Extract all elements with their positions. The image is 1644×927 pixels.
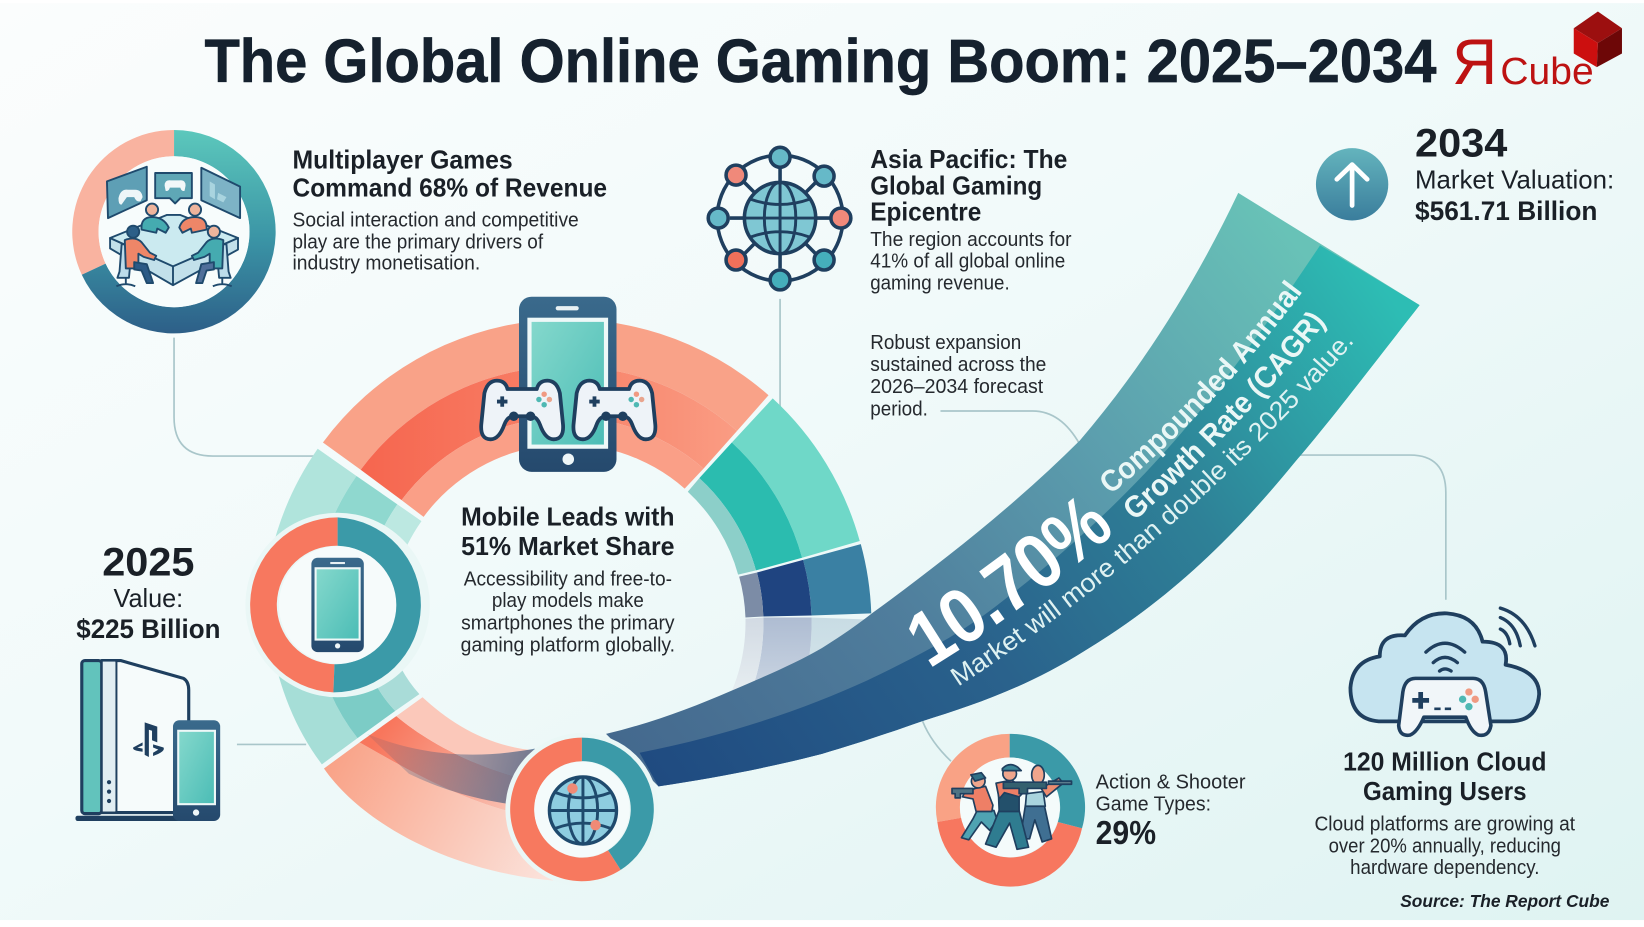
panel: asia pacific: [708, 144, 1072, 294]
text block: forecast period: [870, 331, 1046, 421]
source note: Source: The Report Cube: [1400, 891, 1609, 911]
icon: globe network: [708, 147, 851, 290]
logo: Я: [1452, 25, 1497, 98]
icon: phone with two controllers: [481, 297, 655, 472]
CAGR label line 2: Growth Rate (CAGR): [1125, 312, 1328, 517]
main ring chart: [263, 319, 871, 881]
text block: forecast period: Robust expansion: [870, 331, 1021, 354]
ring segment: coral mobile: [323, 319, 769, 517]
heading: Epicentre: [870, 197, 981, 227]
icon: console and phone: [75, 661, 220, 821]
donut: action: [936, 734, 1085, 887]
icon: players at table: [107, 167, 240, 286]
label: Action & Shooter: [1096, 770, 1246, 793]
ring segment: faded blue: [732, 618, 871, 740]
ring segment: teal: [688, 398, 860, 575]
body text: [1314, 813, 1575, 879]
heading: [870, 144, 1067, 227]
body text: play are the primary drivers of: [293, 230, 543, 253]
panel: mobile leads: [461, 502, 675, 657]
panel: 2025 value: [75, 541, 220, 821]
label: [1096, 770, 1246, 852]
panel: 2034 valuation: $561.71 Billion: [1415, 195, 1597, 226]
growth band: [606, 192, 1420, 786]
heading: [1343, 747, 1546, 806]
band tail shadow: [367, 734, 545, 807]
body text: Social interaction and competitive: [293, 208, 579, 231]
panel: mobile leads: smartphones the primary: [461, 612, 675, 635]
icon: left controller: [481, 381, 563, 439]
icon: right controller: [573, 381, 655, 439]
ring segment: navy: [739, 544, 871, 618]
label: Game Types:: [1096, 792, 1211, 815]
text block: forecast period: period.: [870, 398, 928, 421]
icon: up arrow: [1316, 148, 1388, 220]
label: 29%: [1096, 815, 1156, 852]
heading: [293, 144, 607, 203]
body text: hardware dependency.: [1350, 856, 1539, 879]
panel: mobile leads: gaming platform globally.: [461, 634, 675, 657]
panel: 2025 value: 2025: [102, 541, 194, 585]
band caption: Market will more than double its 2025 value.: [950, 341, 1353, 686]
heading: Asia Pacific: The: [870, 144, 1067, 174]
body text: The region accounts for: [870, 228, 1072, 251]
panel: mobile leads: play models make: [492, 589, 644, 612]
body text: Cloud platforms are growing at: [1314, 813, 1575, 836]
logo: Cube: [1500, 50, 1594, 92]
heading: Command 68% of Revenue: [293, 173, 607, 203]
text block: forecast period: sustained across the: [870, 353, 1046, 376]
ring segment: fading coral lower: [324, 697, 556, 881]
panel: cloud gaming: [1314, 608, 1575, 879]
donut: multiplayer: [72, 130, 276, 333]
body text: over 20% annually, reducing: [1329, 834, 1561, 857]
ring segment: light teal upper: [263, 449, 421, 623]
panel: 2034 valuation: Market Valuation:: [1415, 164, 1614, 194]
connector lines: [174, 299, 1446, 761]
body text: industry monetisation.: [293, 251, 480, 274]
panel: mobile leads: Accessibility and free-to-: [464, 568, 672, 591]
body text: 41% of all global online: [870, 249, 1065, 272]
panel: action and shooter: [936, 734, 1246, 887]
icon: cloud controller: [1350, 608, 1539, 735]
panel: mobile leads: 51% Market Share: [461, 531, 675, 561]
body text: [293, 208, 579, 274]
heading: Multiplayer Games: [293, 144, 513, 174]
CAGR figure: 10.70%: [909, 498, 1110, 667]
heading: 120 Million Cloud: [1343, 747, 1546, 777]
ring segment: light teal lower: [271, 640, 419, 764]
panel: 2025 value: Value:: [113, 583, 183, 613]
panel: 2034 valuation: [1316, 122, 1614, 226]
text block: forecast period: 2026–2034 forecast: [870, 375, 1044, 398]
body text: gaming revenue.: [870, 271, 1010, 294]
heading: Global Gaming: [870, 170, 1042, 200]
panel: 2025 value: $225 Billion: [76, 613, 220, 644]
heading: Gaming Users: [1363, 776, 1527, 806]
CAGR label line 1: Compounded Annual: [1101, 280, 1302, 491]
body text: [870, 228, 1072, 294]
panel: 2034 valuation: 2034: [1415, 122, 1507, 166]
donut: globe: [505, 733, 658, 886]
icon: globe: [549, 777, 616, 844]
donut: mobile phone: [245, 513, 430, 697]
panel: multiplayer games: [72, 130, 607, 333]
title: The Global Online Gaming Boom: 2025–2034: [204, 27, 1437, 95]
logo: [1452, 12, 1622, 98]
icon: small phone: [311, 558, 364, 652]
panel: mobile leads: Mobile Leads with: [461, 502, 675, 532]
icon: three shooters: [952, 765, 1072, 849]
